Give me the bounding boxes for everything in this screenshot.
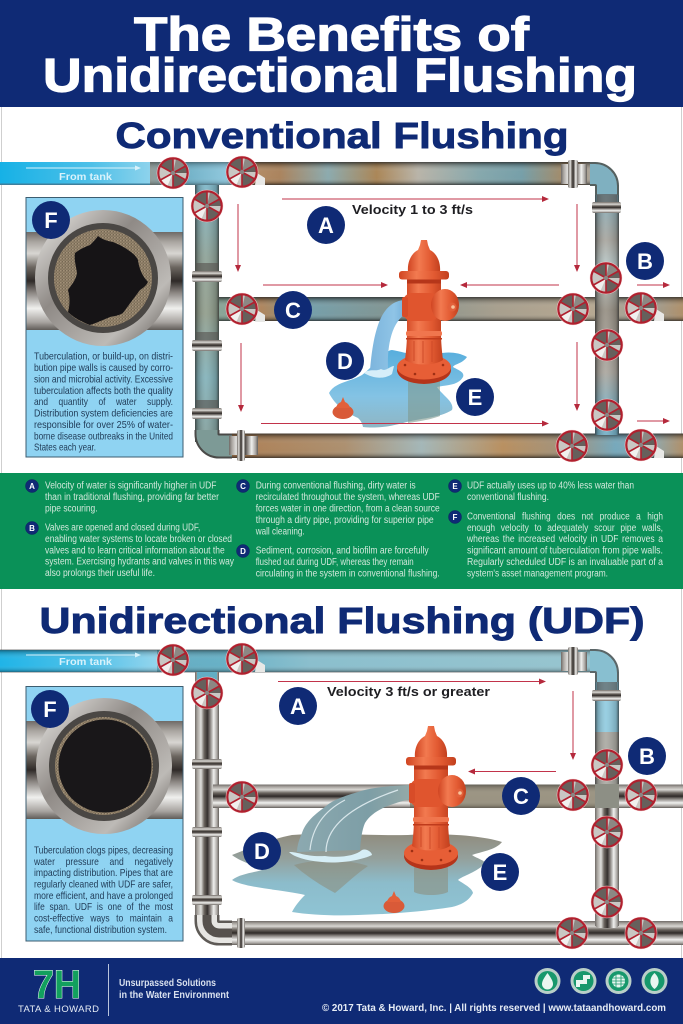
flow arrows	[235, 196, 670, 426]
item E: conventional flushing.	[467, 492, 549, 503]
pipe: top run	[245, 162, 591, 185]
callout C: C	[285, 298, 301, 323]
water stream	[364, 300, 410, 378]
pipe: bottom run	[232, 434, 683, 458]
callout C	[274, 291, 312, 329]
callout F	[32, 201, 70, 239]
panel text: cost-effective ways to maintain a	[34, 914, 173, 924]
item C	[236, 480, 440, 538]
hydrant	[404, 726, 466, 870]
pipe: tank inlet	[0, 162, 245, 185]
velocity label: Velocity 3 ft/s or greater	[327, 684, 490, 699]
callout C: C	[513, 784, 529, 809]
item A: A	[29, 482, 35, 491]
item F	[448, 510, 663, 580]
item F: F	[453, 513, 458, 522]
tagline: in the Water Environment	[119, 990, 230, 1001]
tagline	[119, 978, 230, 1001]
logo	[18, 963, 99, 1015]
callout A: A	[318, 213, 334, 238]
callout D	[326, 342, 364, 380]
logo: 7H	[33, 963, 81, 1007]
footer band	[0, 958, 683, 1024]
callout E: E	[493, 860, 507, 885]
panel text	[34, 352, 174, 454]
panel text: tuberculation affects both the quality	[34, 386, 174, 397]
item C: During conventional flushing, dirty water is	[256, 480, 416, 492]
diagram: UDF pipes	[0, 643, 683, 949]
pipe: middle run	[212, 784, 683, 808]
panel text: water pressure and negatively	[33, 857, 174, 868]
logo: TATA & HOWARD	[18, 1004, 99, 1015]
hydrant cap on ground	[384, 891, 404, 913]
icon: water drop	[534, 968, 560, 994]
callout B	[626, 242, 664, 280]
panel text: sion and microbial activity. Excessive	[34, 374, 173, 386]
icon: pipe	[570, 968, 596, 994]
item C: C	[240, 482, 246, 491]
item C: wall cleaning.	[255, 526, 305, 538]
from tank label and arrow	[26, 166, 141, 183]
item B: B	[29, 524, 35, 533]
flange wedges beside valves	[255, 173, 664, 458]
pipe cross-section with heavy build-up	[26, 210, 182, 346]
panel text: responsible for over 25% of water-	[34, 420, 173, 431]
callout F: F	[43, 697, 57, 722]
item D: D	[240, 547, 246, 556]
panel text	[33, 846, 174, 936]
tagline: Unsurpassed Solutions	[119, 978, 216, 989]
item E	[448, 480, 634, 503]
item B	[26, 522, 234, 579]
callout B: B	[639, 744, 655, 769]
water stream	[289, 785, 415, 863]
item D: Sediment, corrosion, and biofilm are forcefully	[256, 546, 429, 556]
panel text: Tuberculation, or build-up, on distri-	[34, 352, 173, 362]
item D	[236, 544, 440, 580]
puddle	[329, 350, 467, 428]
valves	[157, 643, 657, 949]
callout F: F	[44, 208, 58, 233]
flow arrows	[278, 678, 576, 774]
velocity label: Velocity 1 to 3 ft/s	[352, 202, 473, 217]
callout A	[307, 206, 345, 244]
hydrant	[397, 240, 459, 384]
callout E	[456, 378, 494, 416]
pipe: right riser	[590, 661, 619, 928]
panel text: bution pipe walls is caused by corro-	[34, 363, 173, 374]
item C: through a dirty pipe, providing for superior pipe	[256, 515, 434, 526]
header banner	[0, 0, 683, 107]
item A: than in traditional flushing, providing far better	[45, 492, 220, 503]
from tank label and arrow: From tank	[59, 657, 112, 668]
diagram: conventional flushing pipes	[0, 156, 683, 462]
panel text: Distribution system deficiencies are	[34, 408, 173, 420]
valves	[157, 156, 657, 462]
panel text: life span. UDF is one of the most	[34, 902, 173, 913]
callout E: E	[468, 385, 482, 410]
flange wedges beside valves	[255, 660, 265, 672]
panel text: more efficient, and have a prolonged	[34, 891, 173, 902]
icon: sphere	[606, 968, 632, 994]
pipe: right riser	[590, 174, 619, 435]
heading: unidirectional flushing: Unidirectional Flushing (UDF)	[40, 600, 644, 641]
icon: leaf	[642, 968, 668, 994]
pipe: left riser	[195, 185, 232, 446]
item B: valves and to learn critical information about the	[45, 546, 225, 556]
item B: enabling water systems to locate broken or closed	[45, 534, 232, 545]
item A: pipe scouring.	[45, 504, 98, 514]
pipe: middle run	[219, 297, 683, 321]
item B: also prolongs their useful life.	[45, 568, 155, 579]
callout A: A	[290, 694, 306, 719]
panel text: States each year.	[34, 442, 96, 454]
callout A	[279, 687, 317, 725]
puddle	[232, 834, 502, 915]
copyright line: © 2017 Tata & Howard, Inc. | All rights reserved | www.tataandhoward.com	[322, 1002, 666, 1014]
panel text: Tuberculation clogs pipes, decreasing	[34, 846, 173, 856]
panel text: and quantity of water supply.	[34, 397, 173, 408]
panel: clean pipe	[26, 686, 183, 941]
pipe couplings	[192, 647, 621, 948]
pipe: bottom run	[232, 921, 683, 945]
from tank label and arrow	[26, 652, 141, 668]
hydrant reflection	[408, 378, 440, 423]
item C: recirculated throughout the system, whereas UDF	[256, 492, 440, 503]
callout C	[502, 777, 540, 815]
pipe: tank inlet and top run	[0, 650, 595, 672]
item E: UDF actually uses up to 40% less water than	[467, 480, 634, 492]
item D: circulating in the system in conventional flushing.	[256, 568, 440, 580]
item E: E	[452, 482, 458, 491]
callout D: D	[337, 349, 353, 374]
header banner: Unidirectional Flushing	[43, 48, 637, 102]
item B: Valves are opened and closed during UDF,	[45, 522, 200, 534]
from tank label and arrow: From tank	[59, 172, 112, 183]
callout F	[31, 690, 69, 728]
item A	[26, 480, 220, 514]
pipe: left riser	[195, 672, 232, 933]
header banner: The Benefits of	[134, 8, 529, 60]
callout D	[243, 832, 281, 870]
panel text: regularly cleaned with UDF are safer,	[34, 880, 173, 890]
panel text: impacting distribution. Pipes that are	[34, 868, 173, 879]
callout D: D	[254, 839, 270, 864]
divider	[108, 964, 109, 1016]
callout E	[481, 853, 519, 891]
panel text: borne disease outbreaks in the United	[34, 432, 173, 442]
heading: conventional flushing: Conventional Flushing	[116, 115, 568, 156]
item C: forces water in one direction, from a clean source	[256, 504, 440, 514]
item B: system. Exercising hydrants and valves in this way	[45, 556, 234, 568]
reflections in puddle	[294, 861, 448, 895]
item F: system's asset management program.	[467, 568, 608, 580]
panel text: safe, functional distribution system.	[34, 925, 167, 936]
panel: green explanation band	[0, 473, 683, 589]
panel: tuberculated pipe	[26, 198, 183, 457]
item D: flushed out during UDF, whereas they remain	[256, 557, 414, 568]
callout B: B	[637, 249, 653, 274]
hydrant cap on ground	[332, 397, 354, 419]
pipe couplings	[192, 160, 621, 461]
pipe cross-section with light build-up	[26, 698, 182, 834]
callout B	[628, 737, 666, 775]
item A: Velocity of water is significantly higher in UDF	[45, 480, 216, 492]
